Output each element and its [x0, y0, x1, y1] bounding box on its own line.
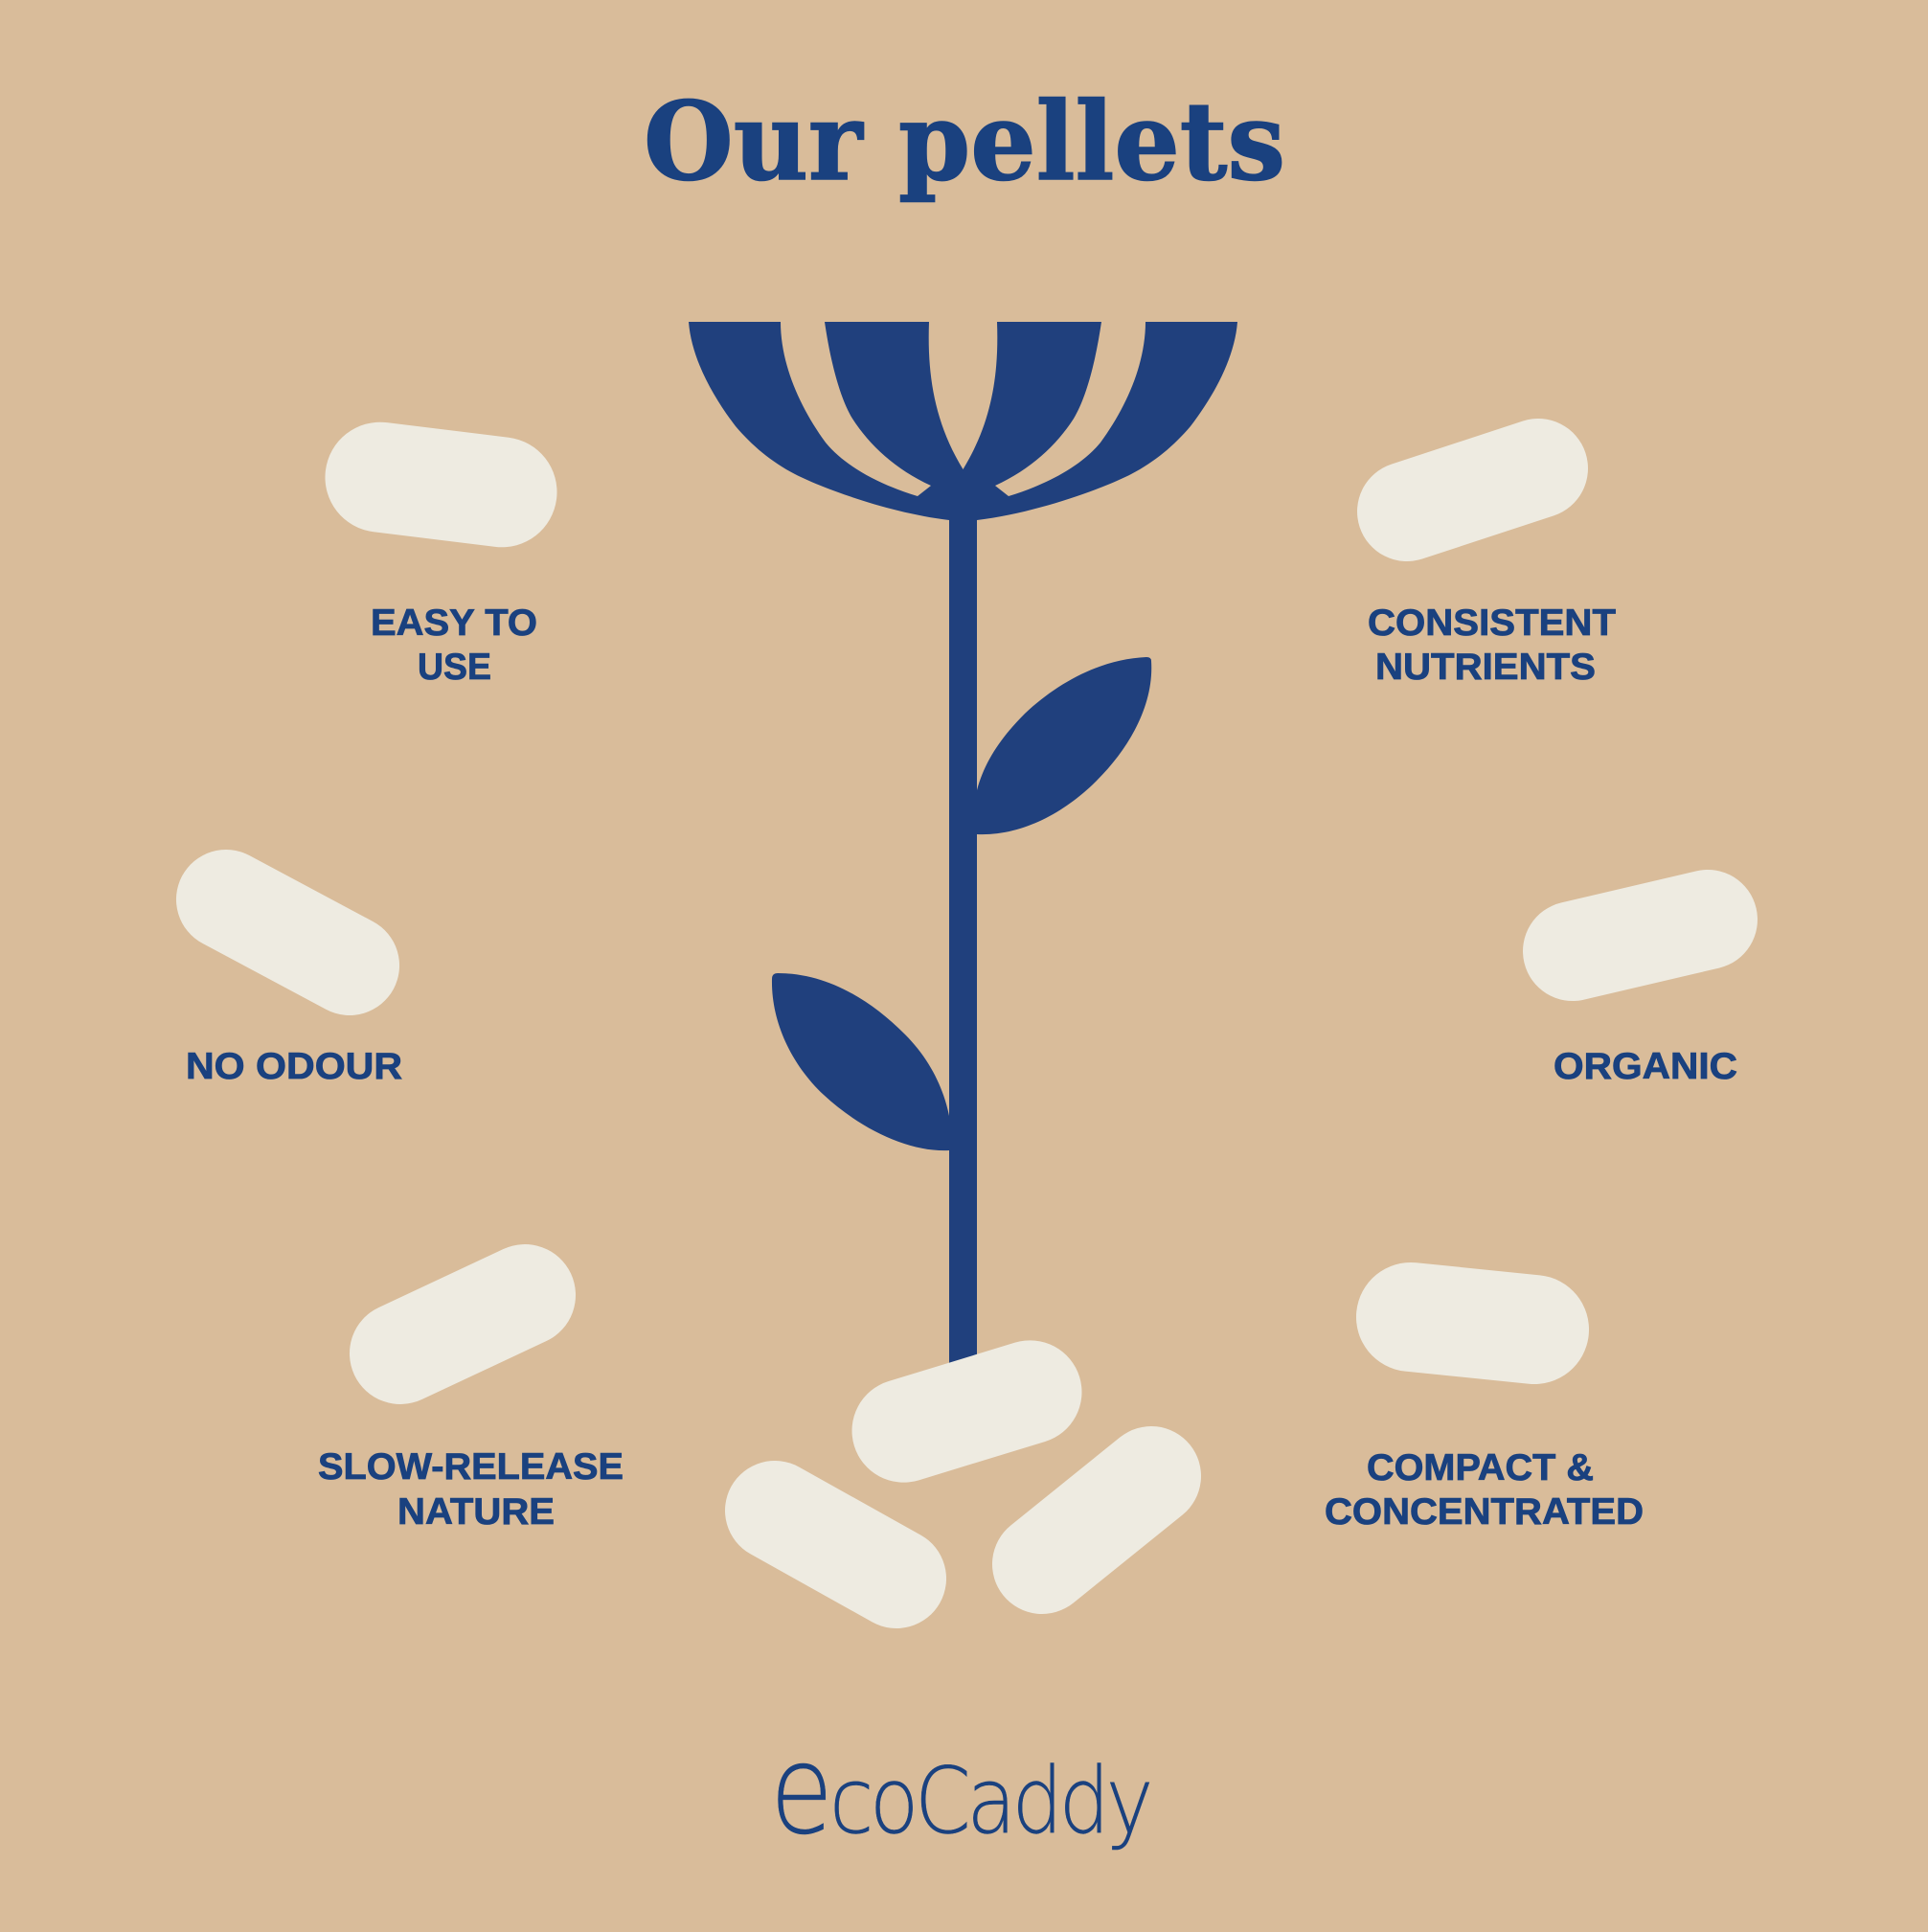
upper leaf [977, 657, 1151, 834]
title: Our pellets [644, 80, 1285, 205]
icon: pellet [333, 1228, 592, 1421]
flower head [689, 322, 1237, 520]
icon: pellet [1513, 859, 1767, 1011]
logo: EcoCaddy: coCaddy [829, 1749, 1150, 1854]
label: compact and concentrated: CONCENTRATED [1325, 1491, 1644, 1533]
pellet pile at flower base [707, 1328, 1221, 1647]
label: easy to use: USE [418, 647, 491, 688]
label: slow-release nature: SLOW-RELEASE [318, 1446, 624, 1488]
pellet: bottom right [972, 1406, 1221, 1634]
logo: EcoCaddy [770, 1719, 1150, 1862]
label: slow-release nature: NATURE [397, 1491, 555, 1533]
label: no odour: NO ODOUR [186, 1046, 402, 1087]
feature: no odour [159, 832, 417, 1087]
feature: consistent nutrients [1344, 405, 1616, 688]
flower stem [949, 517, 977, 1379]
label: compact and concentrated [1325, 1447, 1644, 1533]
icon: pellet [319, 416, 563, 554]
icon: pellet [159, 832, 417, 1033]
icon: pellet [1344, 405, 1601, 575]
pellet: top [839, 1328, 1095, 1495]
label: organic: ORGANIC [1554, 1046, 1737, 1087]
icon: pellet [1351, 1257, 1594, 1390]
pellet: bottom left [707, 1443, 964, 1647]
label: slow-release nature [318, 1446, 624, 1533]
label: consistent nutrients: NUTRIENTS [1375, 647, 1596, 688]
label: compact and concentrated: COMPACT & [1367, 1447, 1594, 1489]
feature: easy to use [319, 416, 563, 688]
logo: EcoCaddy: e [770, 1719, 833, 1862]
feature: slow-release nature [318, 1228, 624, 1533]
feature: compact and concentrated [1325, 1257, 1644, 1533]
illustration: flower [689, 322, 1237, 1379]
label: easy to use: EASY TO [371, 602, 537, 644]
label: consistent nutrients: CONSISTENT [1368, 602, 1616, 644]
lower leaf [772, 973, 949, 1150]
feature: organic [1513, 859, 1767, 1087]
label: consistent nutrients [1368, 602, 1616, 688]
label: easy to use [371, 602, 537, 688]
